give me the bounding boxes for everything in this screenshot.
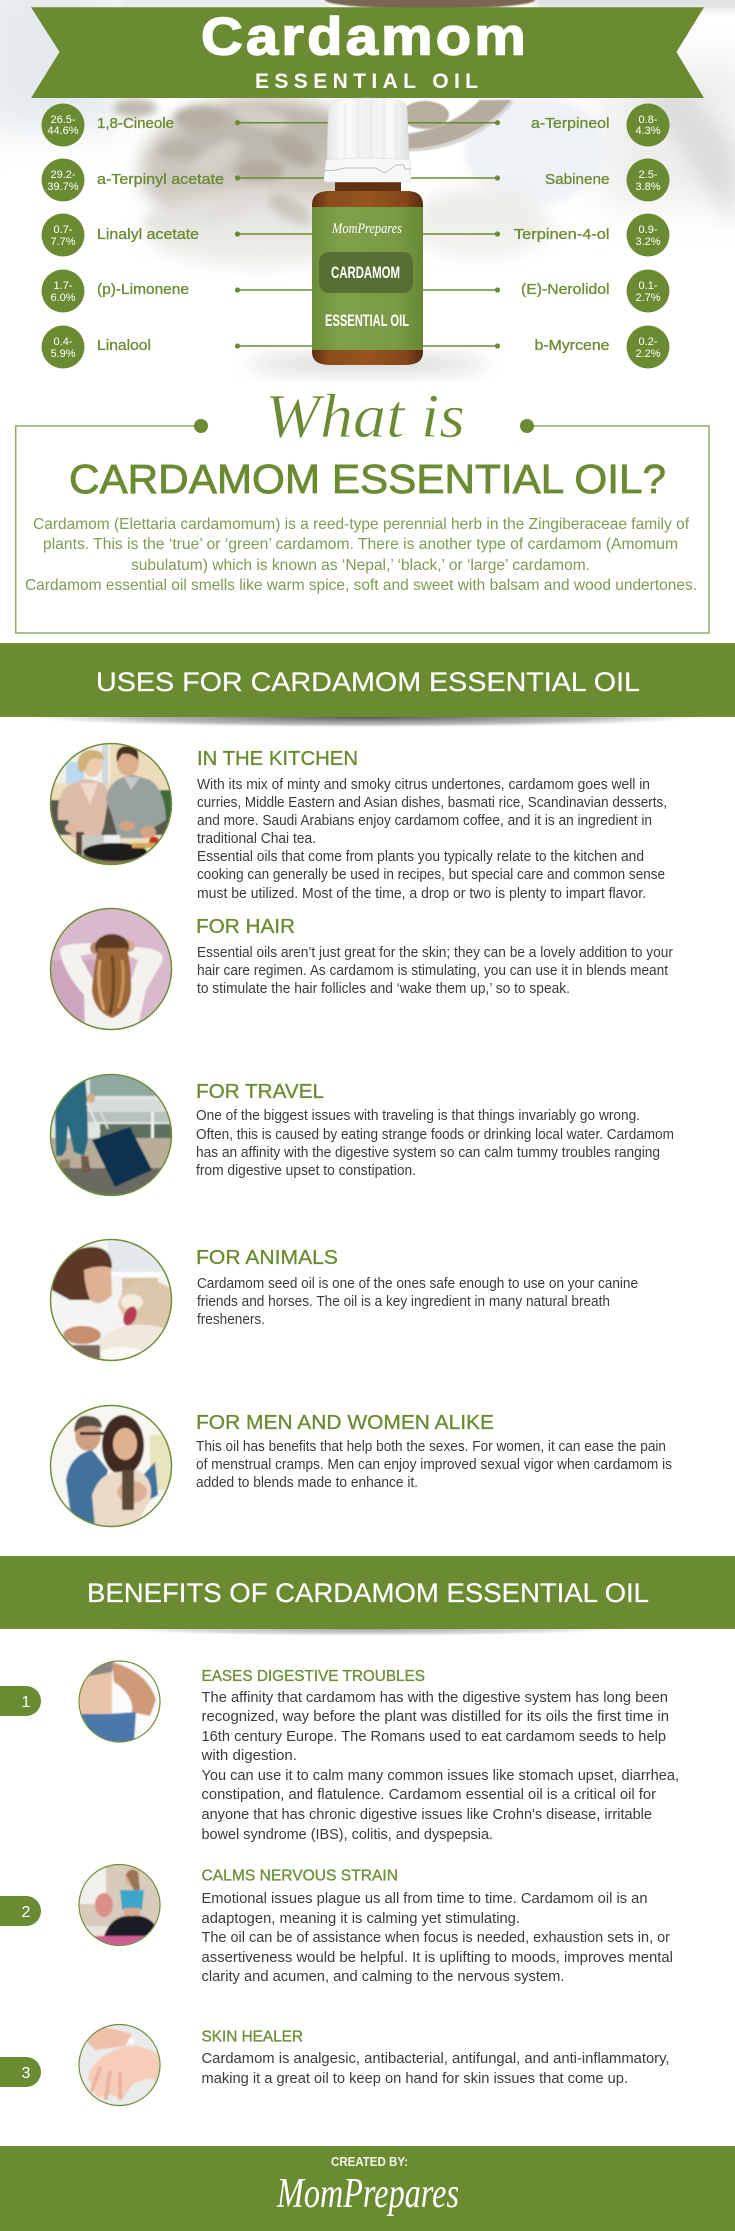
bottle label pill xyxy=(319,252,413,293)
compound: 1,8-Cineole: 44.6% xyxy=(47,125,79,137)
body text: for men and women alike xyxy=(196,1439,672,1491)
compound: (p)-Limonene: 1.7- xyxy=(54,280,73,292)
compound: (E)-Nerolidol: 2.7% xyxy=(635,292,661,304)
use: for hair xyxy=(50,908,673,1030)
benefit 1: eases digestive troubles xyxy=(0,1660,679,1843)
body text: eases digestive troubles: You can use it to calm many common issues like stomach upset, diarrhea, xyxy=(202,1768,679,1784)
body text: for animals xyxy=(197,1276,638,1328)
footer xyxy=(0,2146,735,2231)
compound: Sabinene: Sabinene xyxy=(545,172,610,188)
number tab 1 xyxy=(0,1686,41,1716)
body text: calms nervous strain: clarity and acumen, and calming to the nervous system. xyxy=(202,1969,564,1985)
compound: Terpinen-4-ol xyxy=(514,214,670,256)
number tab 1: 1 xyxy=(22,1694,31,1711)
footer logo: MomPrepares: MomPrepares xyxy=(276,2171,459,2217)
title banner xyxy=(31,7,704,98)
heading: eases digestive troubles: EASES DIGESTIVE TROUBLES xyxy=(202,1668,425,1685)
compound: (E)-Nerolidol: 0.1- xyxy=(639,280,658,292)
body text: skin healer: Cardamom is analgesic, antibacterial, antifungal, and anti-inflammatory, xyxy=(202,2051,670,2067)
heading: calms nervous strain: CALMS NERVOUS STRAIN xyxy=(202,1868,398,1884)
body text: for travel: has an affinity with the digestive system so can calm tummy troubles ranging xyxy=(196,1145,660,1161)
background photo: cardamom pods in a bowl xyxy=(0,0,735,268)
compound: (p)-Limonene: 6.0% xyxy=(50,292,76,304)
compound: 1,8-Cineole: 26.5- xyxy=(50,114,76,126)
compound: Linalyl acetate: 0.7- xyxy=(54,224,73,236)
paragraph: description: Cardamom essential oil smells like warm spice, soft and sweet with balsam and wood undertones. xyxy=(25,577,697,594)
body text: for hair: Essential oils aren’t just great for the skin; they can be a lovely addition to your xyxy=(197,945,673,961)
compound: a-Terpineol: a-Terpineol xyxy=(531,116,610,132)
body text: for men and women alike: added to blends made to enhance it. xyxy=(196,1475,418,1491)
body text: for hair: to stimulate the hair follicles and ‘wake them up,’ so to speak. xyxy=(197,981,570,997)
compound: Sabinene: 2.5- xyxy=(639,169,658,181)
compound: b-Myrcene: 2.2% xyxy=(635,348,661,360)
body text: skin healer xyxy=(202,2051,670,2087)
body text: skin healer: making it a great oil to keep on hand for skin issues that come up. xyxy=(202,2071,628,2087)
body text: in the kitchen: Essential oils that come from plants you typically relate to the kitchen and xyxy=(197,849,644,865)
compound: (p)-Limonene xyxy=(42,270,189,312)
compound: (E)-Nerolidol: (E)-Nerolidol xyxy=(521,282,610,298)
connector lines xyxy=(235,120,500,349)
body text: for animals: friends and horses. The oil is a key ingredient in many natural breath xyxy=(197,1294,610,1310)
section banner: uses xyxy=(0,643,735,728)
use: in the kitchen xyxy=(50,743,667,902)
photo: woman meditating xyxy=(78,1864,162,1948)
compound: Linalyl acetate xyxy=(42,214,199,256)
compound: Terpinen-4-ol: 0.9- xyxy=(639,224,658,236)
body text: in the kitchen: must be utilized. Most of the time, a drop or two is plenty to impart flavor. xyxy=(197,886,646,902)
heading: for animals: FOR ANIMALS xyxy=(196,1247,338,1269)
use: for travel xyxy=(50,1074,674,1198)
photo: traveller with suitcase xyxy=(50,1074,172,1198)
body text: calms nervous strain: The oil can be of assistance when focus is needed, exhaustion sets in, or xyxy=(202,1930,670,1946)
compound: b-Myrcene: 0.2- xyxy=(639,336,658,348)
compound: a-Terpineol: 0.8- xyxy=(639,114,658,126)
section banner: benefits: BENEFITS OF CARDAMOM ESSENTIAL OIL xyxy=(87,1578,649,1608)
photo: hands applying cream xyxy=(78,2024,162,2108)
body text: eases digestive troubles: constipation, and flatulence. Cardamom essential oil is a critical oil for xyxy=(202,1787,656,1803)
heading: for travel: FOR TRAVEL xyxy=(196,1081,324,1103)
heading: in the kitchen: IN THE KITCHEN xyxy=(197,748,358,770)
body text: for animals: fresheners. xyxy=(197,1312,265,1328)
benefit 2: calms nervous strain xyxy=(0,1864,673,1985)
number tab 2 xyxy=(0,1896,41,1926)
body text: eases digestive troubles: with digestion. xyxy=(200,1748,297,1764)
body text: calms nervous strain xyxy=(202,1891,673,1985)
panel: what is cardamom essential oil xyxy=(16,383,709,633)
number tab 3: 3 xyxy=(22,2065,31,2082)
essential oil bottle xyxy=(248,98,488,374)
body text: eases digestive troubles: bowel syndrome (IBS), colitis, and dyspepsia. xyxy=(202,1827,493,1843)
compound: b-Myrcene: b-Myrcene xyxy=(534,338,610,354)
compound: Terpinen-4-ol: 3.2% xyxy=(635,236,661,248)
heading: skin healer: SKIN HEALER xyxy=(202,2028,303,2046)
body text: eases digestive troubles: 16th century Europe. The Romans used to eat cardamom seeds to help xyxy=(202,1729,666,1745)
body text: in the kitchen: With its mix of minty and smoky citrus undertones, cardamom goes well in xyxy=(197,777,650,793)
compound: a-Terpineol: 4.3% xyxy=(635,125,661,137)
compound: Sabinene: 3.8% xyxy=(635,181,661,193)
compound: 1,8-Cineole: 1,8-Cineole xyxy=(97,116,174,132)
compound: Linalool xyxy=(42,326,151,368)
benefit 3: skin healer xyxy=(0,2024,670,2108)
photo: woman with long hair xyxy=(50,908,172,1030)
body text: in the kitchen: traditional Chai tea. xyxy=(197,831,316,847)
compound: a-Terpinyl acetate: a-Terpinyl acetate xyxy=(97,172,224,188)
heading: Cardamom: Cardamom xyxy=(201,8,529,66)
body text: for travel xyxy=(196,1108,674,1179)
photo: waist and loose jeans xyxy=(78,1660,162,1744)
bottle text: Cardamom: CARDAMOM xyxy=(331,263,400,282)
body text: eases digestive troubles: anyone that has chronic digestive issues like Crohn's disease, irritable xyxy=(202,1807,652,1823)
body text: eases digestive troubles xyxy=(200,1690,679,1843)
compound: a-Terpinyl acetate: 39.7% xyxy=(47,181,79,193)
compound: Linalyl acetate: Linalyl acetate xyxy=(97,227,199,243)
section banner: benefits xyxy=(0,1556,735,1636)
body text: in the kitchen: cooking can generally be used in recipes, but special care and common sense xyxy=(197,867,665,883)
body text: for travel: Often, this is caused by eating strange foods or drinking local water. Cardamom xyxy=(196,1127,674,1143)
bottle text: Essential Oil: ESSENTIAL OIL xyxy=(325,311,409,330)
compound: 1,8-Cineole xyxy=(42,104,174,146)
compound: b-Myrcene xyxy=(534,326,670,368)
use: for animals xyxy=(50,1239,638,1361)
compound: Linalool: 5.9% xyxy=(50,348,76,360)
section banner: uses: USES FOR CARDAMOM ESSENTIAL OIL xyxy=(96,667,640,697)
paragraph: description xyxy=(25,516,697,594)
heading: Essential Oil: ESSENTIAL OIL xyxy=(255,70,478,93)
compound: a-Terpineol xyxy=(531,104,670,146)
body text: for hair xyxy=(197,945,673,997)
photo: woman with husky puppy xyxy=(50,1239,174,1361)
compound: (E)-Nerolidol xyxy=(521,270,670,312)
body text: in the kitchen: and more. Saudi Arabians enjoy cardamom coffee, and it is an ingredient in xyxy=(197,813,652,829)
number tab 3 xyxy=(0,2057,41,2087)
body text: calms nervous strain: assertiveness would be helpful. It is uplifting to moods, improves mental xyxy=(202,1950,673,1966)
heading: Cardamom Essential Oil?: CARDAMOM ESSENTIAL OIL? xyxy=(69,456,666,502)
body text: for travel: One of the biggest issues with traveling is that things invariably go wrong. xyxy=(196,1108,640,1124)
body text: calms nervous strain: Emotional issues plague us all from time to time. Cardamom oil is an xyxy=(202,1891,648,1907)
heading: for hair: FOR HAIR xyxy=(196,916,295,938)
body text: for men and women alike: of menstrual cramps. Men can enjoy improved sexual vigor when cardamom is xyxy=(196,1457,672,1473)
paragraph: description: Cardamom (Elettaria cardamomum) is a reed-type perennial herb in the Zingiberaceae family of xyxy=(33,516,690,533)
body text: for travel: from digestive upset to constipation. xyxy=(196,1163,416,1179)
photo: couple cooking xyxy=(50,743,174,867)
photo: smiling couple xyxy=(50,1405,172,1527)
body text: eases digestive troubles: recognized, way before the plant was distilled for its oils the first time in xyxy=(202,1709,669,1725)
compound: (p)-Limonene: (p)-Limonene xyxy=(97,282,189,298)
body text: eases digestive troubles: The affinity that cardamom has with the digestive system has long been xyxy=(202,1690,668,1706)
compound: Linalyl acetate: 7.7% xyxy=(50,236,76,248)
use: for men and women alike xyxy=(50,1405,672,1527)
body text: for animals: Cardamom seed oil is one of the ones safe enough to use on your canine xyxy=(197,1276,638,1292)
heading: for men and women alike: FOR MEN AND WOMEN ALIKE xyxy=(196,1412,494,1434)
body text: for hair: hair care regimen. As cardamom is stimulating, you can use it in blends meant xyxy=(197,963,668,979)
footer label: created by: CREATED BY: xyxy=(331,2155,408,2169)
body text: for men and women alike: This oil has benefits that help both the sexes. For women, it can ease the pain xyxy=(196,1439,666,1455)
number tab 2: 2 xyxy=(22,1904,31,1921)
body text: in the kitchen xyxy=(197,777,667,902)
bottle logo: MomPrepares xyxy=(331,221,402,237)
paragraph: description: plants. This is the ‘true’ or ‘green’ cardamom. There is another type of cardamom (Amomum xyxy=(43,536,678,553)
compound: a-Terpinyl acetate: 29.2- xyxy=(50,169,76,181)
script heading: What is: What is xyxy=(265,383,465,451)
paragraph: description: subulatum) which is known as ‘Nepal,’ ‘black,’ or ‘large’ cardamom. xyxy=(131,557,590,574)
compound: a-Terpinyl acetate xyxy=(42,158,224,202)
body text: calms nervous strain: adaptogen, meaning it is calming yet stimulating. xyxy=(202,1911,520,1927)
compound: Linalool: 0.4- xyxy=(54,336,73,348)
compound: Linalool: Linalool xyxy=(97,338,151,354)
compound: Sabinene xyxy=(545,158,670,202)
body text: in the kitchen: curries, Middle Eastern and Asian dishes, basmati rice, Scandinavian desserts, xyxy=(197,795,667,811)
compound: Terpinen-4-ol: Terpinen-4-ol xyxy=(514,227,610,243)
